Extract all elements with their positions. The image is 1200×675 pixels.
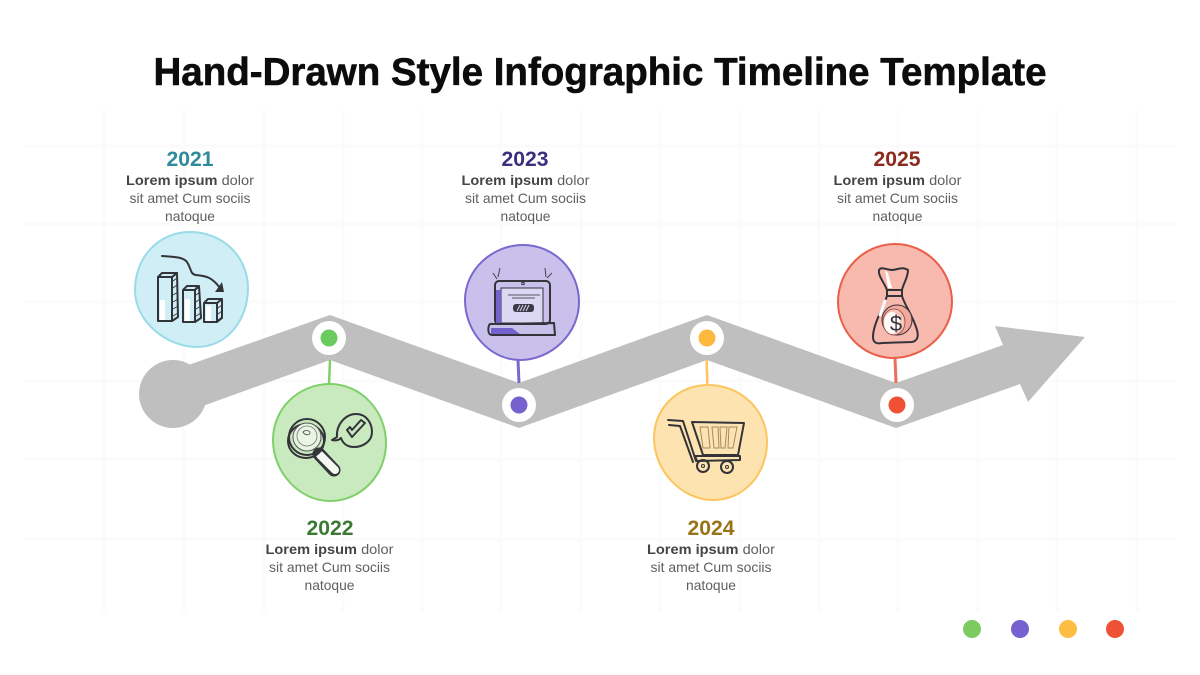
blob 2024 (654, 385, 767, 500)
node 2024 (690, 321, 724, 355)
milestone 2024 (647, 360, 775, 593)
icon: falling bar chart (158, 256, 224, 322)
connector 2024 (705, 360, 709, 385)
text 2025: Lorem ipsum dolor (834, 172, 960, 188)
year 2024: 2024 (688, 517, 735, 540)
icon: money bag: $ (890, 311, 902, 336)
blob 2022 (273, 384, 386, 501)
icon: magnifier and speech bubble (288, 414, 372, 470)
text 2025: natoque (872, 208, 923, 224)
text 2022: natoque (304, 577, 355, 593)
icon: shopping cart (668, 420, 744, 473)
text 2022: sit amet Cum sociis (269, 559, 390, 575)
node 2023 (502, 388, 536, 422)
text 2021: Lorem ipsum dolor (126, 172, 253, 188)
blob 2021 (135, 232, 248, 347)
connector 2022 (329, 360, 330, 384)
year 2022: 2022 (306, 517, 354, 540)
text 2021: sit amet Cum sociis (130, 190, 250, 206)
text 2023: sit amet Cum sociis (465, 190, 586, 206)
milestone 2023 (462, 148, 590, 383)
connector 2023 (518, 360, 519, 383)
text 2022: Lorem ipsum dolor (266, 541, 392, 557)
year 2021: 2021 (166, 148, 214, 171)
icon: money bag (873, 268, 918, 343)
text 2023: Lorem ipsum dolor (462, 172, 588, 188)
text 2021: natoque (165, 208, 215, 224)
connector 2025 (895, 358, 896, 383)
timeline arrow ribbon (139, 315, 1085, 428)
title: Hand-Drawn Style Infographic Timeline Template (154, 51, 1046, 94)
text 2024: sit amet Cum sociis (650, 559, 772, 575)
legend dots (963, 620, 1124, 638)
node 2022 (312, 321, 346, 355)
node 2025 (880, 388, 914, 422)
year 2023: 2023 (502, 148, 548, 171)
text 2025: sit amet Cum sociis (837, 190, 958, 206)
year 2025: 2025 (874, 148, 921, 171)
icon: laptop (488, 268, 555, 335)
blob 2023 (465, 245, 579, 360)
milestone 2022 (266, 360, 394, 593)
blob 2025 (838, 244, 952, 358)
milestone 2021 (126, 148, 254, 347)
milestone 2025 (834, 148, 962, 383)
text 2024: Lorem ipsum dolor (647, 541, 774, 557)
text 2023: natoque (500, 208, 551, 224)
text 2024: natoque (686, 577, 736, 593)
